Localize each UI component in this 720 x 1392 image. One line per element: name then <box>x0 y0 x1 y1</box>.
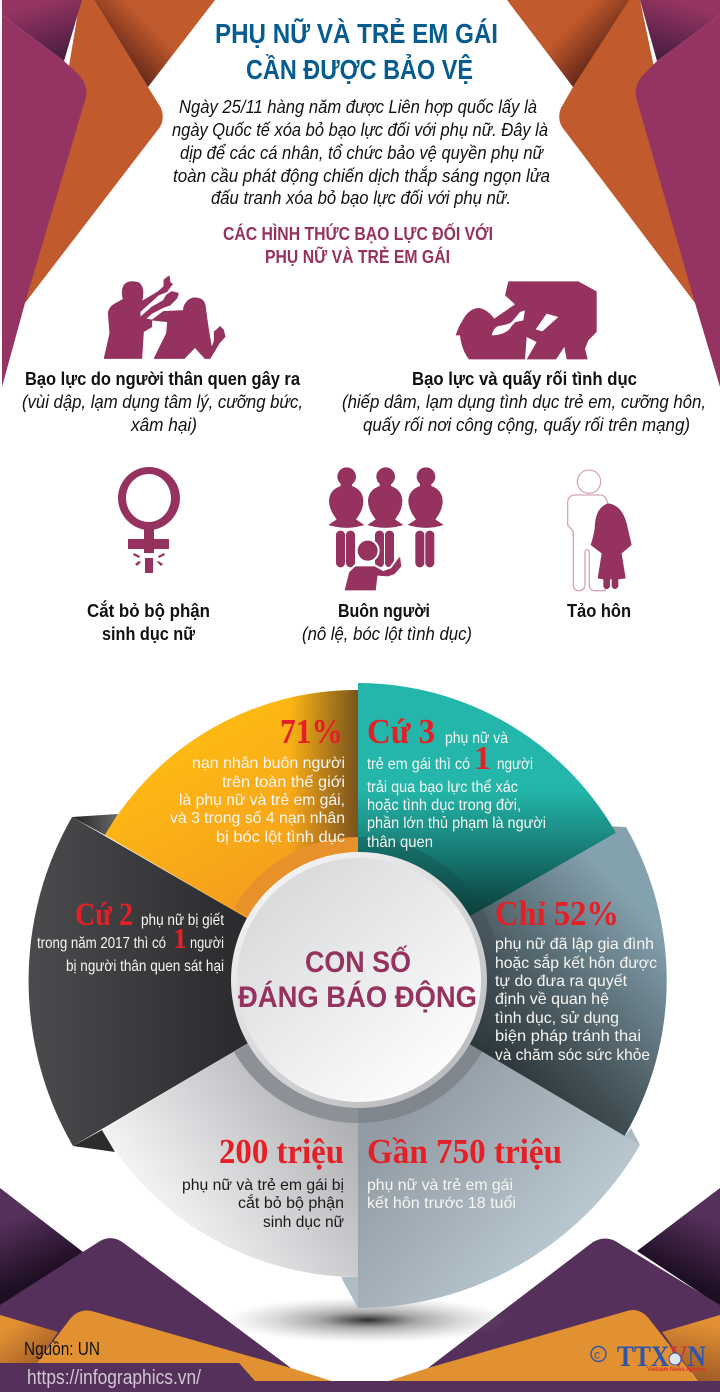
chart: radial segments <box>29 683 667 1308</box>
icon: female symbol cut <box>118 467 180 573</box>
stat: 200 million: sinh dục nữ <box>263 1214 344 1231</box>
stat: 52%: Chỉ 52% <box>495 894 619 933</box>
stat: 52%: hoặc sắp kết hôn được <box>495 953 657 972</box>
segment: light blue <box>358 980 640 1308</box>
stat: 750 million: Gần 750 triệu <box>367 1132 562 1171</box>
stat: 1 in 2: trong năm 2017 thì có <box>37 935 166 952</box>
stat: 1 in 3: Cứ 3 <box>367 712 435 751</box>
label: sexual violence <box>342 368 706 435</box>
intro text: dịp để các cá nhân, tổ chức bảo vệ quyền phụ nữ <box>180 142 544 163</box>
center title: ĐÁNG BÁO ĐỘNG <box>238 980 477 1014</box>
stat: 200 million <box>182 1132 344 1231</box>
stat: 1 in 3: phụ nữ và <box>445 730 508 747</box>
center title <box>238 945 477 1014</box>
stat: 71%: trên toàn thế giới <box>222 774 345 791</box>
stat: 1 in 3: người <box>497 756 533 773</box>
stat: 1 in 2: Cứ 2 <box>75 897 133 933</box>
background: bottom right shapes <box>387 1188 720 1382</box>
disc band <box>234 837 501 1123</box>
title <box>215 17 498 85</box>
stat: 750 million <box>367 1132 562 1212</box>
label: female genital mutilation: Cắt bỏ bộ phận <box>87 600 210 621</box>
stat: 52%: và chăm sóc sức khỏe <box>495 1047 650 1064</box>
stat: 71%: bị bóc lột tình dục <box>216 829 345 846</box>
center disc <box>231 852 487 1108</box>
stat: 1 in 3: hoặc tình dục trong đời, <box>367 797 521 814</box>
intro text: toàn cầu phát động chiến dịch thắp sáng ngọn lửa <box>173 165 550 186</box>
stat: 52%: định về quan hệ <box>495 991 609 1008</box>
icon: domestic violence silhouettes <box>104 276 225 358</box>
stat: 1 in 3 <box>367 712 546 851</box>
stat: 1 in 2: người <box>190 935 224 952</box>
segment: light grey <box>102 980 358 1277</box>
segment: blue grey <box>358 827 667 1137</box>
stat: 52%: phụ nữ đã lập gia đình <box>495 936 654 953</box>
stat: 750 million: kết hôn trước 18 tuổi <box>367 1194 516 1212</box>
segment: 71% yellow <box>105 690 358 980</box>
icon: human trafficking <box>328 467 444 591</box>
segment: teal <box>358 683 616 980</box>
section heading: PHỤ NỮ VÀ TRẺ EM GÁI <box>265 246 450 267</box>
stat: 1 in 3: phần lớn thủ phạm là người <box>367 815 546 832</box>
label: sexual violence: quấy rối nơi công cộng, quấy rối trên mạng) <box>363 414 690 435</box>
background: bottom left shapes <box>0 1188 333 1382</box>
segment: fold pieces <box>72 814 640 1308</box>
label: domestic violence: Bạo lực do người thân quen gây ra <box>25 368 301 389</box>
label: trafficking <box>302 600 472 644</box>
title: CẦN ĐƯỢC BẢO VỆ <box>246 53 473 85</box>
title: PHỤ NỮ VÀ TRẺ EM GÁI <box>215 17 498 49</box>
intro text <box>172 96 550 208</box>
stat: 71% <box>170 712 345 846</box>
stat: 52%: biện pháp tránh thai <box>495 1028 641 1045</box>
stat: 1 in 2: 1 <box>173 924 187 955</box>
stat: 52%: tình dục, sử dụng <box>495 1010 619 1027</box>
stat: 1 in 2 <box>37 897 224 975</box>
label: domestic violence: (vùi dập, lạm dụng tâm lý, cưỡng bức, <box>22 391 303 412</box>
source: Nguồn: UN <box>24 1339 100 1359</box>
label: trafficking: Buôn người <box>338 600 430 621</box>
stat: 750 million: phụ nữ và trẻ em gái <box>367 1177 513 1194</box>
stat: 71%: 71% <box>280 712 343 751</box>
stat: 71%: và 3 trong số 4 nạn nhân <box>170 810 345 827</box>
stat: 200 million: phụ nữ và trẻ em gái bị <box>182 1177 344 1194</box>
center title: CON SỐ <box>305 945 411 979</box>
stat: 1 in 3: trẻ em gái thì có <box>367 756 470 773</box>
label: trafficking: (nô lệ, bóc lột tình dục) <box>302 623 472 644</box>
floor shadow <box>223 1297 513 1343</box>
background: top left curtain <box>2 0 215 387</box>
stat: 200 million: cắt bỏ bộ phận <box>238 1193 344 1212</box>
icon: child marriage <box>568 470 632 591</box>
logo: TTXVN: TTXVN <box>617 1340 706 1373</box>
stat: 71%: là phụ nữ và trẻ em gái, <box>179 792 345 809</box>
stat: 1 in 3: trải qua bạo lực thể xác <box>367 778 518 796</box>
stat: 1 in 2: phụ nữ bị giết <box>141 912 224 929</box>
intro text: đấu tranh xóa bỏ bạo lực đối với phụ nữ. <box>211 187 511 208</box>
label: domestic violence: xâm hại) <box>130 414 197 435</box>
label: sexual violence: Bạo lực và quấy rối tình dục <box>412 368 637 389</box>
section heading: CÁC HÌNH THỨC BẠO LỰC ĐỐI VỚI <box>223 223 493 244</box>
stat: 52% <box>495 894 657 1064</box>
icon: sexual violence silhouettes <box>456 281 597 359</box>
segment: dark <box>29 817 358 1146</box>
stat: 1 in 3: thân quen <box>367 834 433 851</box>
stat: 200 million: 200 triệu <box>219 1132 344 1171</box>
label: female genital mutilation: sinh dục nữ <box>102 623 196 644</box>
background: bottom strip <box>0 1363 720 1392</box>
website url: https://infographics.vn/ <box>27 1367 201 1389</box>
stat: 52%: tự do đưa ra quyết <box>495 973 628 990</box>
intro text: Ngày 25/11 hàng năm được Liên hợp quốc lấy là <box>179 96 537 117</box>
stat: 1 in 3: 1 <box>474 740 491 777</box>
intro text: ngày Quốc tế xóa bỏ bạo lực đối với phụ nữ. Đây là <box>172 119 548 140</box>
label: child marriage: Tảo hôn <box>567 600 631 621</box>
stat: 1 in 2: bị người thân quen sát hại <box>66 958 224 975</box>
background: top right curtain <box>507 0 720 387</box>
logo: TTXVN: c <box>594 1348 600 1362</box>
section heading <box>223 223 493 267</box>
logo: TTXVN: Vietnam News Agency <box>647 1367 707 1373</box>
label: domestic violence <box>22 368 303 435</box>
label: female genital mutilation <box>87 600 210 644</box>
stat: 71%: nạn nhân buôn người <box>192 755 345 772</box>
